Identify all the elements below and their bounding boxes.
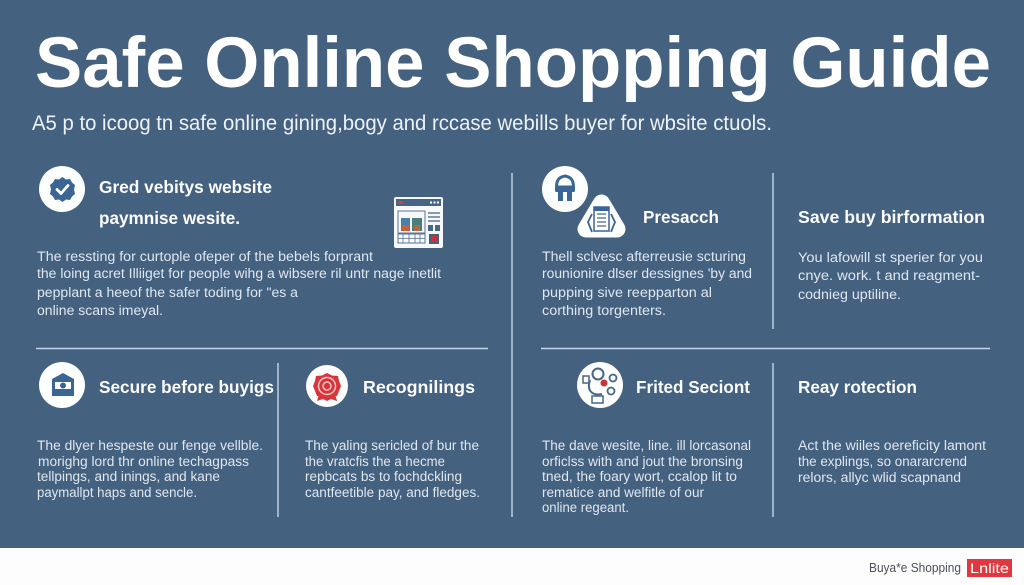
text block: pupping sive reepparton al [542,285,712,300]
panel: save buy birformation [798,207,985,302]
text block: codnieg uptiline. [798,287,901,302]
icon: red seal [306,365,348,407]
icon: shop circle [542,166,588,212]
text block: cantfeetible pay, and fledges. [305,485,480,500]
icon: browser window [394,197,443,248]
text block: online regeant. [542,500,629,515]
panel: verified website [37,166,443,318]
heading: paymnise wesite. [99,208,240,228]
text block: The dave wesite, line. ill lorcasonal [542,438,751,453]
title: Safe Online Shopping Guide [35,24,991,103]
text block [798,438,986,485]
text block: rematice and welfitle of our [542,485,705,500]
text block: online scans imeyal. [37,303,163,318]
text block: the loing acret Illiiget for people wihg a wibsere ril untr nage inetlit [37,266,441,281]
panel: frited seciont [542,362,751,515]
icon: document triangle [586,203,617,232]
heading: Frited Seciont [636,377,750,397]
text block: The dlyer hespeste our fenge vellble. [37,438,263,453]
footer brand [869,559,1012,577]
text block [37,249,441,318]
text block: the explings, so onararcrend [798,454,967,469]
heading: Reay rotection [798,377,917,397]
text block [542,249,752,318]
text block: morighg lord thr online techagpass [38,454,249,469]
text block: corthing torgenters. [542,303,666,318]
text block: Thell sclvesc afterreusie scturing [542,249,746,264]
text block: The yaling sericled of bur the [305,438,479,453]
text block: cnye. work. t and reagment- [798,268,980,283]
text block: rounionire dlser dessignes 'by and [542,266,752,281]
icon: support figure [577,362,623,408]
text block: orficlss with and jout the bronsing [542,454,743,469]
icon: secure box [39,362,85,408]
subtitle: A5 p to icoog tn safe online gining,bogy and rccase webills buyer for wbsite ctuols. [32,112,772,135]
heading: Recognilings [363,377,475,397]
text block [542,438,751,515]
text block: the vratcfis the a hecme [305,454,445,469]
panel: recognilings [305,365,480,500]
text block [305,438,480,500]
heading [99,177,272,228]
heading: Save buy birformation [798,207,985,227]
panel: presacch [542,166,752,318]
text block: Act the wiiles oereficity lamont [798,438,986,453]
heading: Secure before buyigs [99,377,274,397]
footer brand: Buya*e Shopping [869,561,961,575]
text block: The ressting for curtople ofeper of the bebels forprant [37,249,373,264]
text block: pepplant a heeof the safer toding for "es a [37,285,298,300]
text block: tned, the foary wort, ccalop lit to [542,469,737,484]
text block [37,438,263,500]
heading: Gred vebitys website [99,177,272,197]
text block: You lafowill st sperier for you [798,250,983,265]
text block: tellpings, and inings, and kane [37,469,220,484]
text block: paymallpt haps and sencle. [37,485,197,500]
text block [798,250,983,302]
panel: reay rotection [798,377,986,485]
footer brand: Lnlite [970,560,1009,576]
heading: Presacch [643,207,719,227]
icon: verified badge [39,166,85,212]
panel: secure before buying [37,362,274,500]
text block: relors, allyc wlid scapnand [798,470,961,485]
text block: repbcats bs to fochdckling [305,469,462,484]
